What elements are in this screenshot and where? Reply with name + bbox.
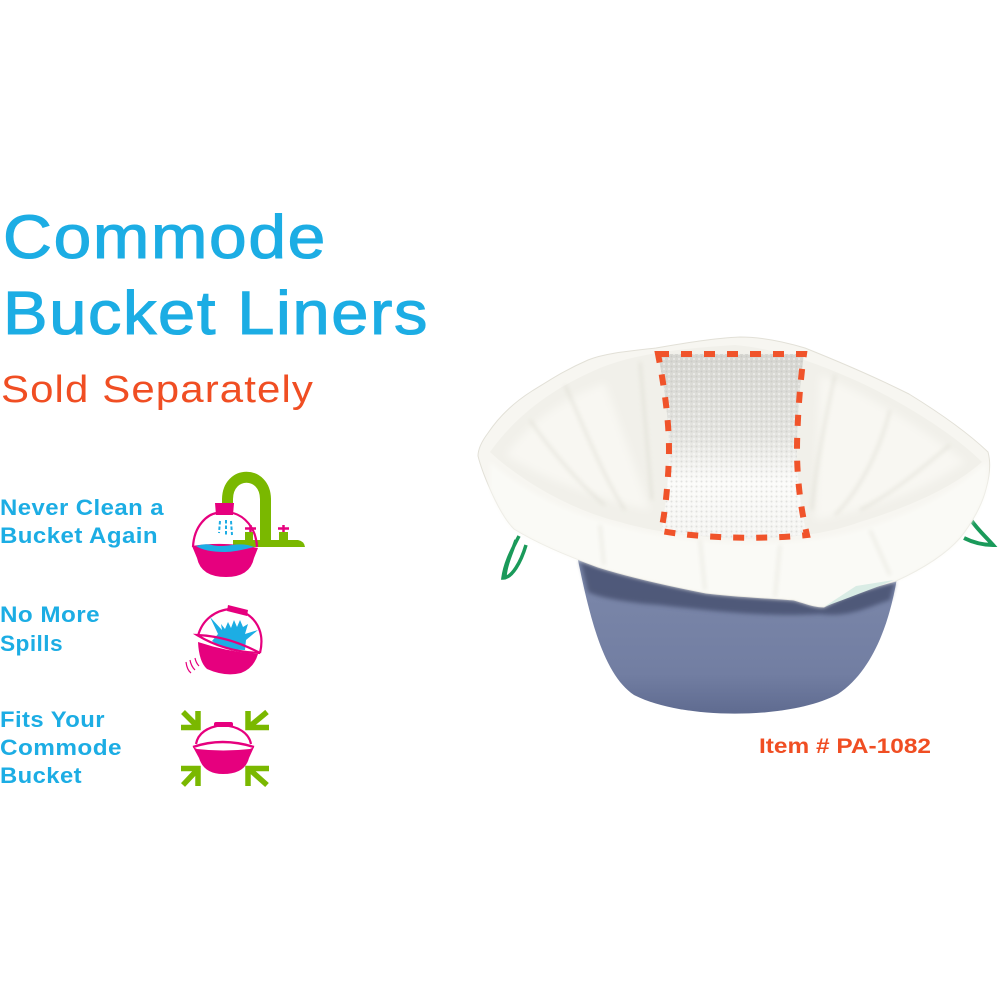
bucket shadow under liner (580, 560, 895, 615)
pad texture (658, 354, 807, 538)
product photo: bucket with liner (478, 337, 993, 714)
liner outer (478, 337, 990, 607)
feature: fits your commode bucket: Commode (0, 735, 122, 760)
green drawstring left (503, 536, 526, 578)
item number: Item # PA-1082 (759, 735, 931, 758)
liner front rim (490, 462, 988, 607)
icon: bucket with fit arrows (181, 711, 269, 786)
title: Bucket Liners (3, 279, 429, 347)
subtitle: sold separately: Sold Separately (1, 369, 314, 411)
absorbent pad (658, 354, 807, 538)
feature: no more spills: Spills (0, 631, 63, 656)
icon: bucket with splash (186, 605, 261, 674)
icon: faucet filling bucket (192, 477, 305, 577)
feature: never clean a bucket again: Bucket Again (0, 523, 158, 548)
title (3, 203, 429, 347)
feature: no more spills: No More (0, 602, 100, 627)
liner teal fold (824, 580, 894, 607)
green drawstring right (964, 520, 993, 545)
liner folds (500, 362, 970, 570)
liner lit patches (506, 383, 650, 510)
bucket body (577, 555, 897, 714)
feature: fits your commode bucket: Fits Your (0, 707, 105, 732)
feature: fits your commode bucket: Bucket (0, 763, 82, 788)
liner interior shading (490, 345, 982, 539)
orange dashed outline (658, 354, 807, 538)
feature: no more spills (0, 602, 100, 656)
liner rim creases (600, 525, 890, 597)
feature: never clean a bucket again (0, 495, 164, 548)
title: Commode (3, 203, 327, 271)
feature: never clean a bucket again: Never Clean a (0, 495, 164, 520)
feature: fits your commode bucket (0, 707, 122, 788)
